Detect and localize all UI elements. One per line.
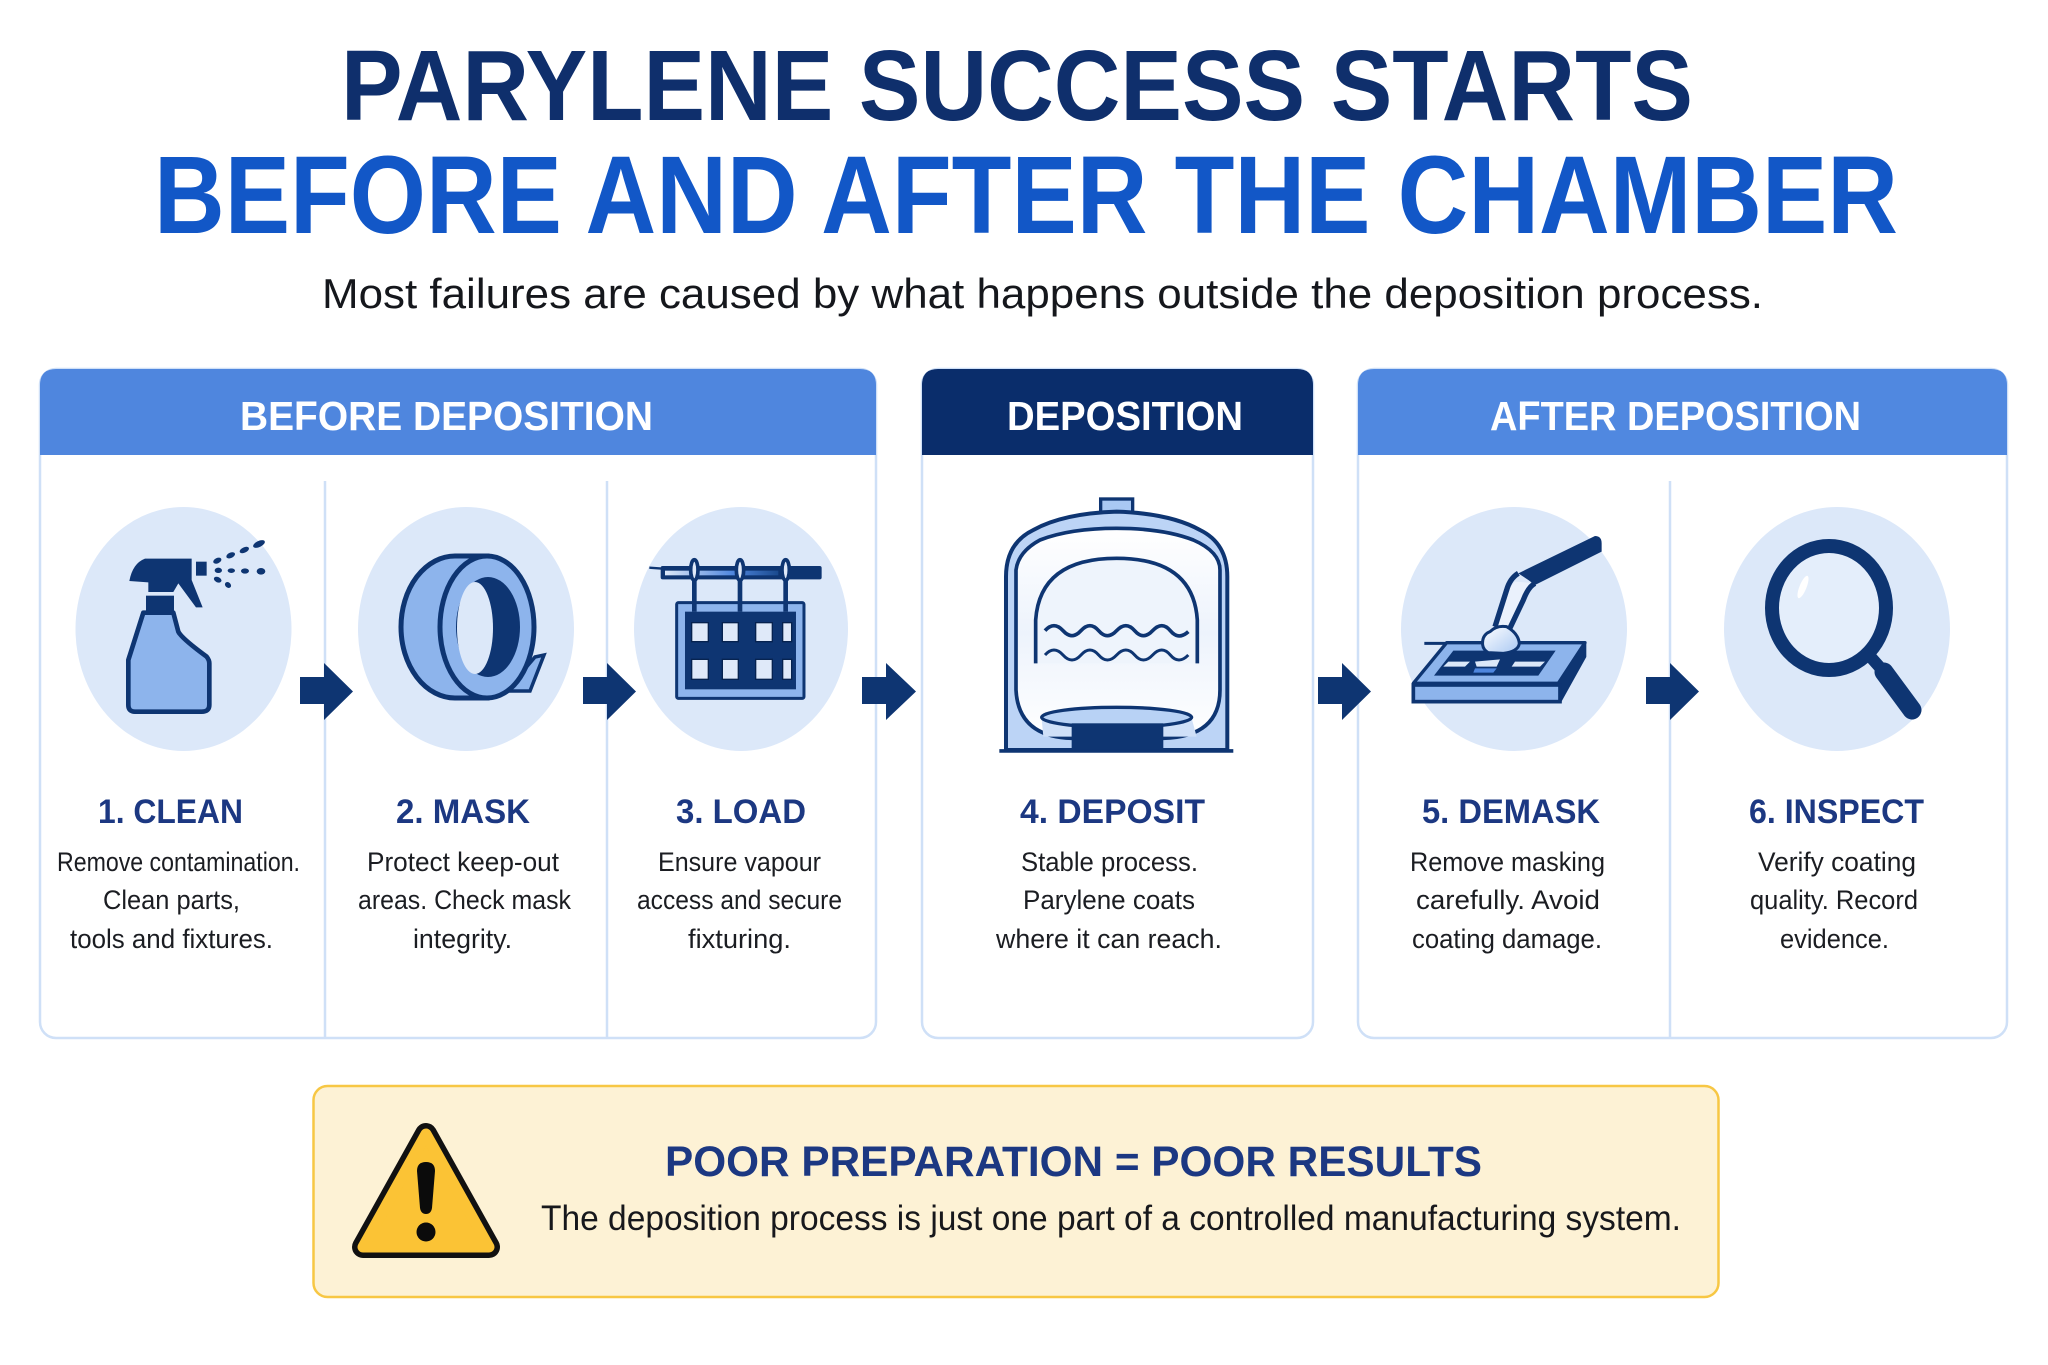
step text: mask: integrity. [413, 924, 512, 954]
icon: spray bottle [76, 507, 292, 751]
callout heading: POOR PREPARATION = POOR RESULTS [665, 1138, 1482, 1186]
step text: demask: carefully. Avoid [1416, 885, 1600, 915]
step text: load: access and secure [637, 885, 842, 915]
callout: poor preparation [314, 1086, 1718, 1297]
step text: clean: tools and fixtures. [70, 924, 273, 954]
icon: warning triangle [363, 1134, 489, 1247]
arrow: demask to inspect [1646, 663, 1699, 720]
header: before deposition [40, 369, 876, 455]
header label: after deposition: AFTER DEPOSITION [1490, 393, 1861, 439]
step heading: mask: 2. MASK [396, 793, 530, 831]
icon: tweezers demasking [1401, 507, 1627, 751]
step heading: demask: 5. DEMASK [1422, 793, 1600, 831]
step text: inspect: Verify coating [1758, 847, 1916, 877]
step text: deposit: Stable process. [1021, 847, 1198, 877]
header: deposition [922, 369, 1313, 455]
subtitle: Most failures are caused by what happens outside the deposition process. [322, 270, 1763, 317]
icon: masking tape [358, 507, 574, 751]
step text: load: fixturing. [688, 924, 791, 954]
header label: deposition: DEPOSITION [1007, 393, 1243, 439]
step text: clean [57, 847, 300, 954]
step text: demask: coating damage. [1412, 924, 1602, 954]
step text: clean: Clean parts, [103, 885, 240, 915]
panel: before deposition [40, 369, 876, 1038]
title: PARYLENE SUCCESS STARTS [341, 30, 1693, 142]
arrow: clean to mask [300, 663, 353, 720]
step heading: deposit: 4. DEPOSIT [1020, 793, 1205, 831]
step text: deposit [995, 847, 1222, 954]
icon: loaded fixture [634, 507, 848, 751]
arrow: load to deposit [862, 663, 916, 720]
header: after deposition [1358, 369, 2007, 455]
step heading: load: 3. LOAD [676, 793, 806, 831]
step heading: inspect: 6. INSPECT [1749, 793, 1924, 831]
header label: before deposition: BEFORE DEPOSITION [240, 393, 653, 439]
step text: load: Ensure vapour [658, 847, 821, 877]
step text: load [637, 847, 842, 954]
step heading: clean: 1. CLEAN [98, 793, 243, 831]
step text: inspect: evidence. [1780, 924, 1889, 954]
step text: mask [358, 847, 572, 954]
panel: after deposition [1358, 369, 2007, 1038]
step text: clean: Remove contamination. [57, 847, 300, 877]
step text: inspect [1750, 847, 1918, 954]
arrow: mask to load [583, 663, 636, 720]
title [154, 30, 1898, 257]
step text: mask: Protect keep-out [367, 847, 560, 877]
step text: demask: Remove masking [1410, 847, 1605, 877]
step text: mask: areas. Check mask [358, 885, 572, 915]
callout text: The deposition process is just one part of a controlled manufacturing system. [541, 1199, 1681, 1238]
step text: deposit: where it can reach. [995, 924, 1222, 954]
arrow: deposit to demask [1318, 663, 1371, 720]
step text: deposit: Parylene coats [1023, 885, 1195, 915]
panel: deposition [922, 369, 1313, 1038]
step text: demask [1410, 847, 1605, 954]
step text: inspect: quality. Record [1750, 885, 1918, 915]
icon: deposition chamber [999, 499, 1233, 752]
icon: magnifying glass [1724, 507, 1950, 751]
